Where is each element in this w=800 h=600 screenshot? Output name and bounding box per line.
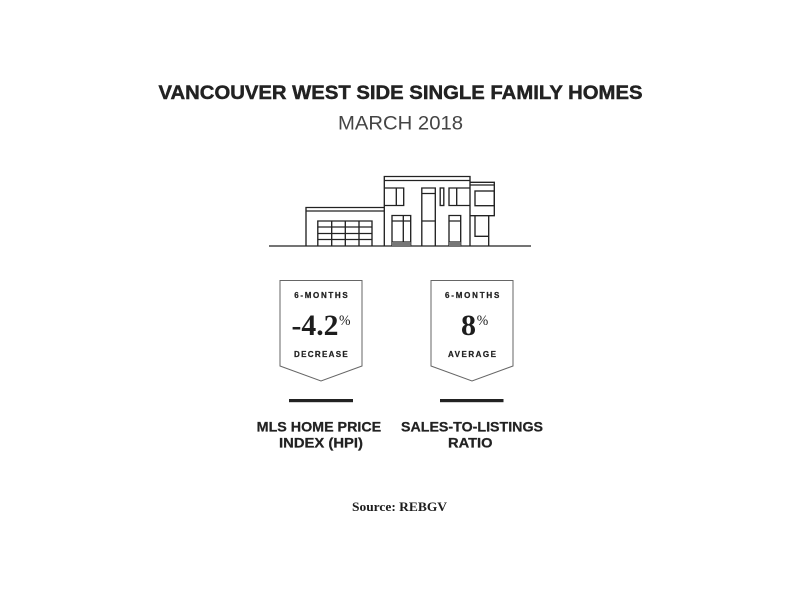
panel: sales-to-listings badge: [431, 280, 513, 381]
label: MLS home price index: INDEX (HPI): [279, 435, 363, 450]
panel: sales-to-listings badge: 6-MONTHS: [445, 291, 500, 300]
panel: HPI badge: [280, 280, 362, 381]
panel: sales-to-listings badge: AVERAGE: [448, 350, 497, 359]
panel: HPI badge: DECREASE: [294, 350, 348, 359]
panel: HPI badge: -4.2: [292, 309, 338, 342]
label: sales-to-listings ratio: [401, 419, 543, 450]
icon: modern house line drawing: [269, 176, 531, 246]
panel: HPI badge: 6-MONTHS: [294, 291, 348, 300]
source note: Source: REBGV: [352, 500, 447, 514]
panel: sales-to-listings badge: %: [477, 313, 488, 329]
subtitle: date: MARCH 2018: [338, 112, 463, 134]
label: sales-to-listings ratio: RATIO: [448, 435, 492, 450]
label: MLS home price index: [257, 419, 381, 450]
label: MLS home price index: MLS HOME PRICE: [257, 419, 381, 434]
title: VANCOUVER WEST SIDE SINGLE FAMILY HOMES: [158, 83, 642, 104]
panel: sales-to-listings badge: 8: [461, 309, 476, 342]
panel: HPI badge: %: [339, 313, 350, 329]
label: sales-to-listings ratio: SALES-TO-LISTINGS: [401, 419, 543, 434]
divider bar: sales-to-listings: [440, 399, 504, 402]
divider bar: HPI: [289, 399, 353, 402]
